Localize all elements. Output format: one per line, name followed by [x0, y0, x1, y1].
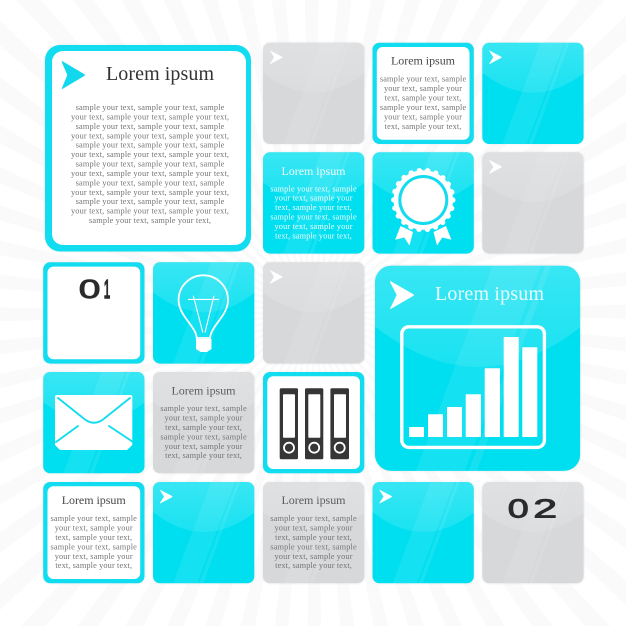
- heading: Lorem ipsum: [282, 164, 346, 178]
- panel: gray arrow tile r3c3: [263, 262, 365, 364]
- heading: Lorem ipsum: [172, 384, 236, 398]
- text block: sample your text, sample your text, sample: [76, 122, 225, 131]
- text block: sample your text, sample: [51, 514, 137, 523]
- text block: your text, sample your text, sample your text,: [71, 169, 229, 178]
- text block: your text, sample your: [55, 552, 133, 561]
- text block: sample your text, sample your text,: [89, 216, 211, 225]
- heading: Lorem ipsum: [62, 493, 126, 507]
- text block: your text, sample your: [384, 84, 462, 93]
- heading: Lorem ipsum: [282, 493, 346, 507]
- heading: Lorem ipsum: [391, 54, 456, 68]
- text block: your text, sample your text, sample your text,: [71, 207, 229, 216]
- text block: text, sample your text,: [275, 561, 352, 570]
- panel: gray text tile r5c3: [263, 482, 365, 584]
- panel: white text card r1c4: [372, 43, 474, 144]
- text block: sample your text, sample: [160, 404, 247, 413]
- number 01: [79, 275, 110, 304]
- bar chart: [402, 327, 544, 447]
- panel: gray arrow tile r2c5: [482, 152, 584, 254]
- text block: your text, sample your: [164, 413, 243, 422]
- text block: text, sample your text,: [275, 533, 352, 542]
- icon: envelope: [55, 395, 133, 450]
- panel: blue arrow tile r1c5: [482, 43, 584, 145]
- text block: text, sample your text,: [385, 94, 461, 103]
- text block: sample your text, sample: [160, 432, 247, 441]
- icon: cyan arrow: [62, 61, 85, 89]
- text block: your text, sample your text, sample your text,: [71, 188, 229, 197]
- text block: your text, sample your text, sample your text,: [71, 150, 229, 159]
- number 02: 2: [533, 494, 557, 523]
- text block: sample your text, sample your text, sample: [76, 178, 225, 187]
- panel: blue text tile r2c3: [263, 152, 365, 254]
- text block: sample your text, sample: [380, 103, 466, 112]
- heading: Lorem ipsum: [106, 63, 214, 85]
- panel: gray arrow tile r1c3: [263, 43, 365, 145]
- text block: text, sample your text,: [165, 423, 242, 432]
- text block: your text, sample your text, sample your text,: [71, 131, 229, 140]
- panel: blue arrow tile r5c2: [153, 482, 255, 584]
- panel: gray text tile r4c2: [153, 372, 255, 474]
- icon: white arrow: [390, 281, 414, 309]
- panel: white text card r5c1: [43, 482, 145, 583]
- text block: sample your text, sample: [270, 184, 357, 193]
- text block: your text, sample your: [274, 222, 353, 231]
- panel: medal tile: [372, 152, 474, 254]
- panel: envelope tile: [43, 372, 145, 474]
- text block: text, sample your text,: [275, 203, 352, 212]
- text block: your text, sample your text, sample your text,: [71, 112, 229, 121]
- panel: chart tile: [375, 266, 582, 472]
- number 02: [508, 494, 557, 523]
- text block: [160, 404, 247, 460]
- text block: your text, sample your: [274, 194, 353, 203]
- text block: text, sample your text,: [385, 122, 461, 131]
- number 01: 1: [104, 276, 110, 304]
- panel: number 02 tile: [482, 482, 584, 584]
- text block: [51, 514, 137, 570]
- panel: blue arrow tile r5c4: [372, 482, 474, 584]
- text block: sample your text, sample your text, sample: [76, 103, 225, 112]
- text block: your text, sample your: [274, 552, 353, 561]
- panel: binders card: [263, 372, 364, 473]
- text block: your text, sample your: [384, 113, 462, 122]
- text block: sample your text, sample: [51, 542, 137, 551]
- text block: text, sample your text,: [55, 561, 132, 570]
- text block: your text, sample your: [274, 523, 353, 532]
- number 02: 0: [508, 494, 529, 523]
- panel: light bulb tile: [153, 262, 255, 364]
- text block: [380, 75, 466, 131]
- icon: light bulb: [179, 275, 228, 352]
- text block: [270, 514, 357, 570]
- text block: sample your text, sample: [380, 75, 466, 84]
- icon: three binders: [280, 388, 349, 459]
- text block: sample your text, sample: [270, 213, 357, 222]
- text block: your text, sample your: [164, 442, 243, 451]
- text block: sample your text, sample: [270, 514, 357, 523]
- text block: [270, 184, 357, 240]
- text block: text, sample your text,: [275, 232, 352, 240]
- text block: sample your text, sample: [270, 542, 357, 551]
- number 01: 0: [79, 275, 100, 304]
- text block: your text, sample your: [55, 523, 133, 532]
- icon: rosette medal: [394, 170, 453, 246]
- text block: sample your text, sample your text, sample: [76, 160, 225, 168]
- heading: Lorem ipsum: [435, 283, 544, 305]
- panel: number 01 card: [43, 262, 145, 364]
- text block: [71, 103, 229, 225]
- text block: text, sample your text,: [55, 533, 132, 542]
- panel: large intro card: [45, 45, 251, 252]
- text block: sample your text, sample your text, sample: [76, 197, 225, 206]
- text block: text, sample your text,: [165, 451, 242, 460]
- text block: sample your text, sample your text, sample: [76, 141, 225, 150]
